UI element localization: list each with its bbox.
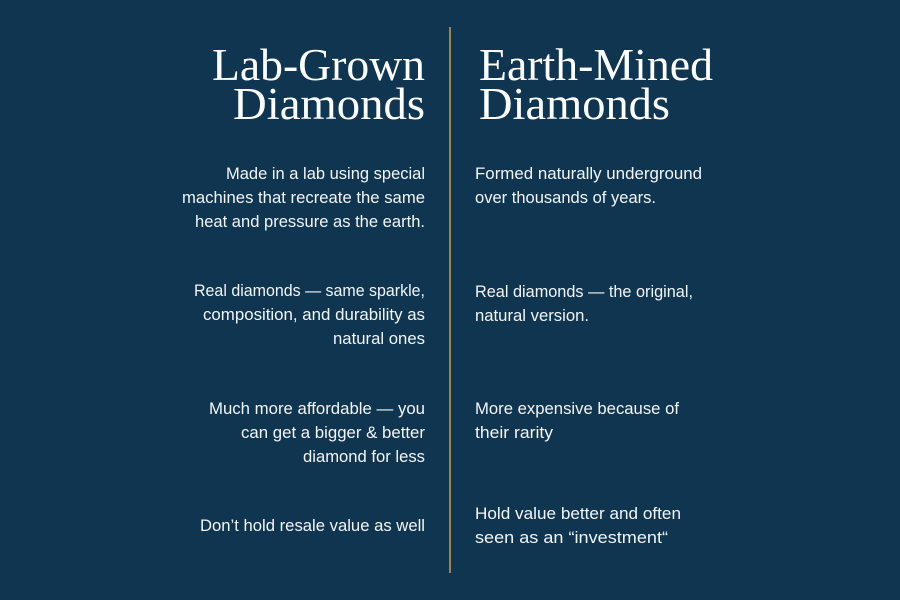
lab-grown text: price: can get a bigger & better [241,423,425,442]
earth-mined text: origin: Formed naturally underground [475,164,702,183]
lab-grown text: origin: heat and pressure as the earth. [195,212,425,231]
lab-grown text: authenticity: composition, and durability as [203,305,425,324]
heading: Earth-Mined Diamonds: Earth-Mined [479,40,713,90]
lab-grown text: price: Much more affordable — you [209,399,425,418]
lab-grown text: origin: Made in a lab using special [226,164,425,183]
lab-grown text: origin [182,164,425,231]
earth-mined text: price: their rarity [475,423,554,442]
heading: Earth-Mined Diamonds: Diamonds [479,79,670,129]
heading: Lab-Grown Diamonds [212,40,425,129]
heading: Lab-Grown Diamonds: Lab-Grown [212,40,425,90]
lab-grown text: price: diamond for less [303,447,425,466]
lab-grown text: price [209,399,425,466]
earth-mined text: price: More expensive because of [475,399,679,418]
earth-mined text: authenticity: Real diamonds — the original, [475,282,693,301]
lab-grown text: authenticity [194,281,425,348]
lab-grown text: authenticity: natural ones [333,329,425,348]
lab-grown text: origin: machines that recreate the same [182,188,425,207]
lab-grown text: authenticity: Real diamonds — same sparkle, [194,281,425,300]
heading: Earth-Mined Diamonds [479,40,713,129]
lab-grown text: resale: Don’t hold resale value as well [200,516,425,535]
earth-mined text: authenticity [475,282,693,325]
earth-mined text: origin: over thousands of years. [475,188,656,207]
earth-mined text: authenticity: natural version. [475,306,589,325]
earth-mined text: price [475,399,679,442]
center divider line [449,27,451,573]
earth-mined text: resale: seen as an “investment“ [475,528,668,547]
earth-mined text: origin [475,164,702,207]
earth-mined text: resale: Hold value better and often [475,504,681,523]
earth-mined text: resale [475,504,681,547]
heading: Lab-Grown Diamonds: Diamonds [233,79,425,129]
